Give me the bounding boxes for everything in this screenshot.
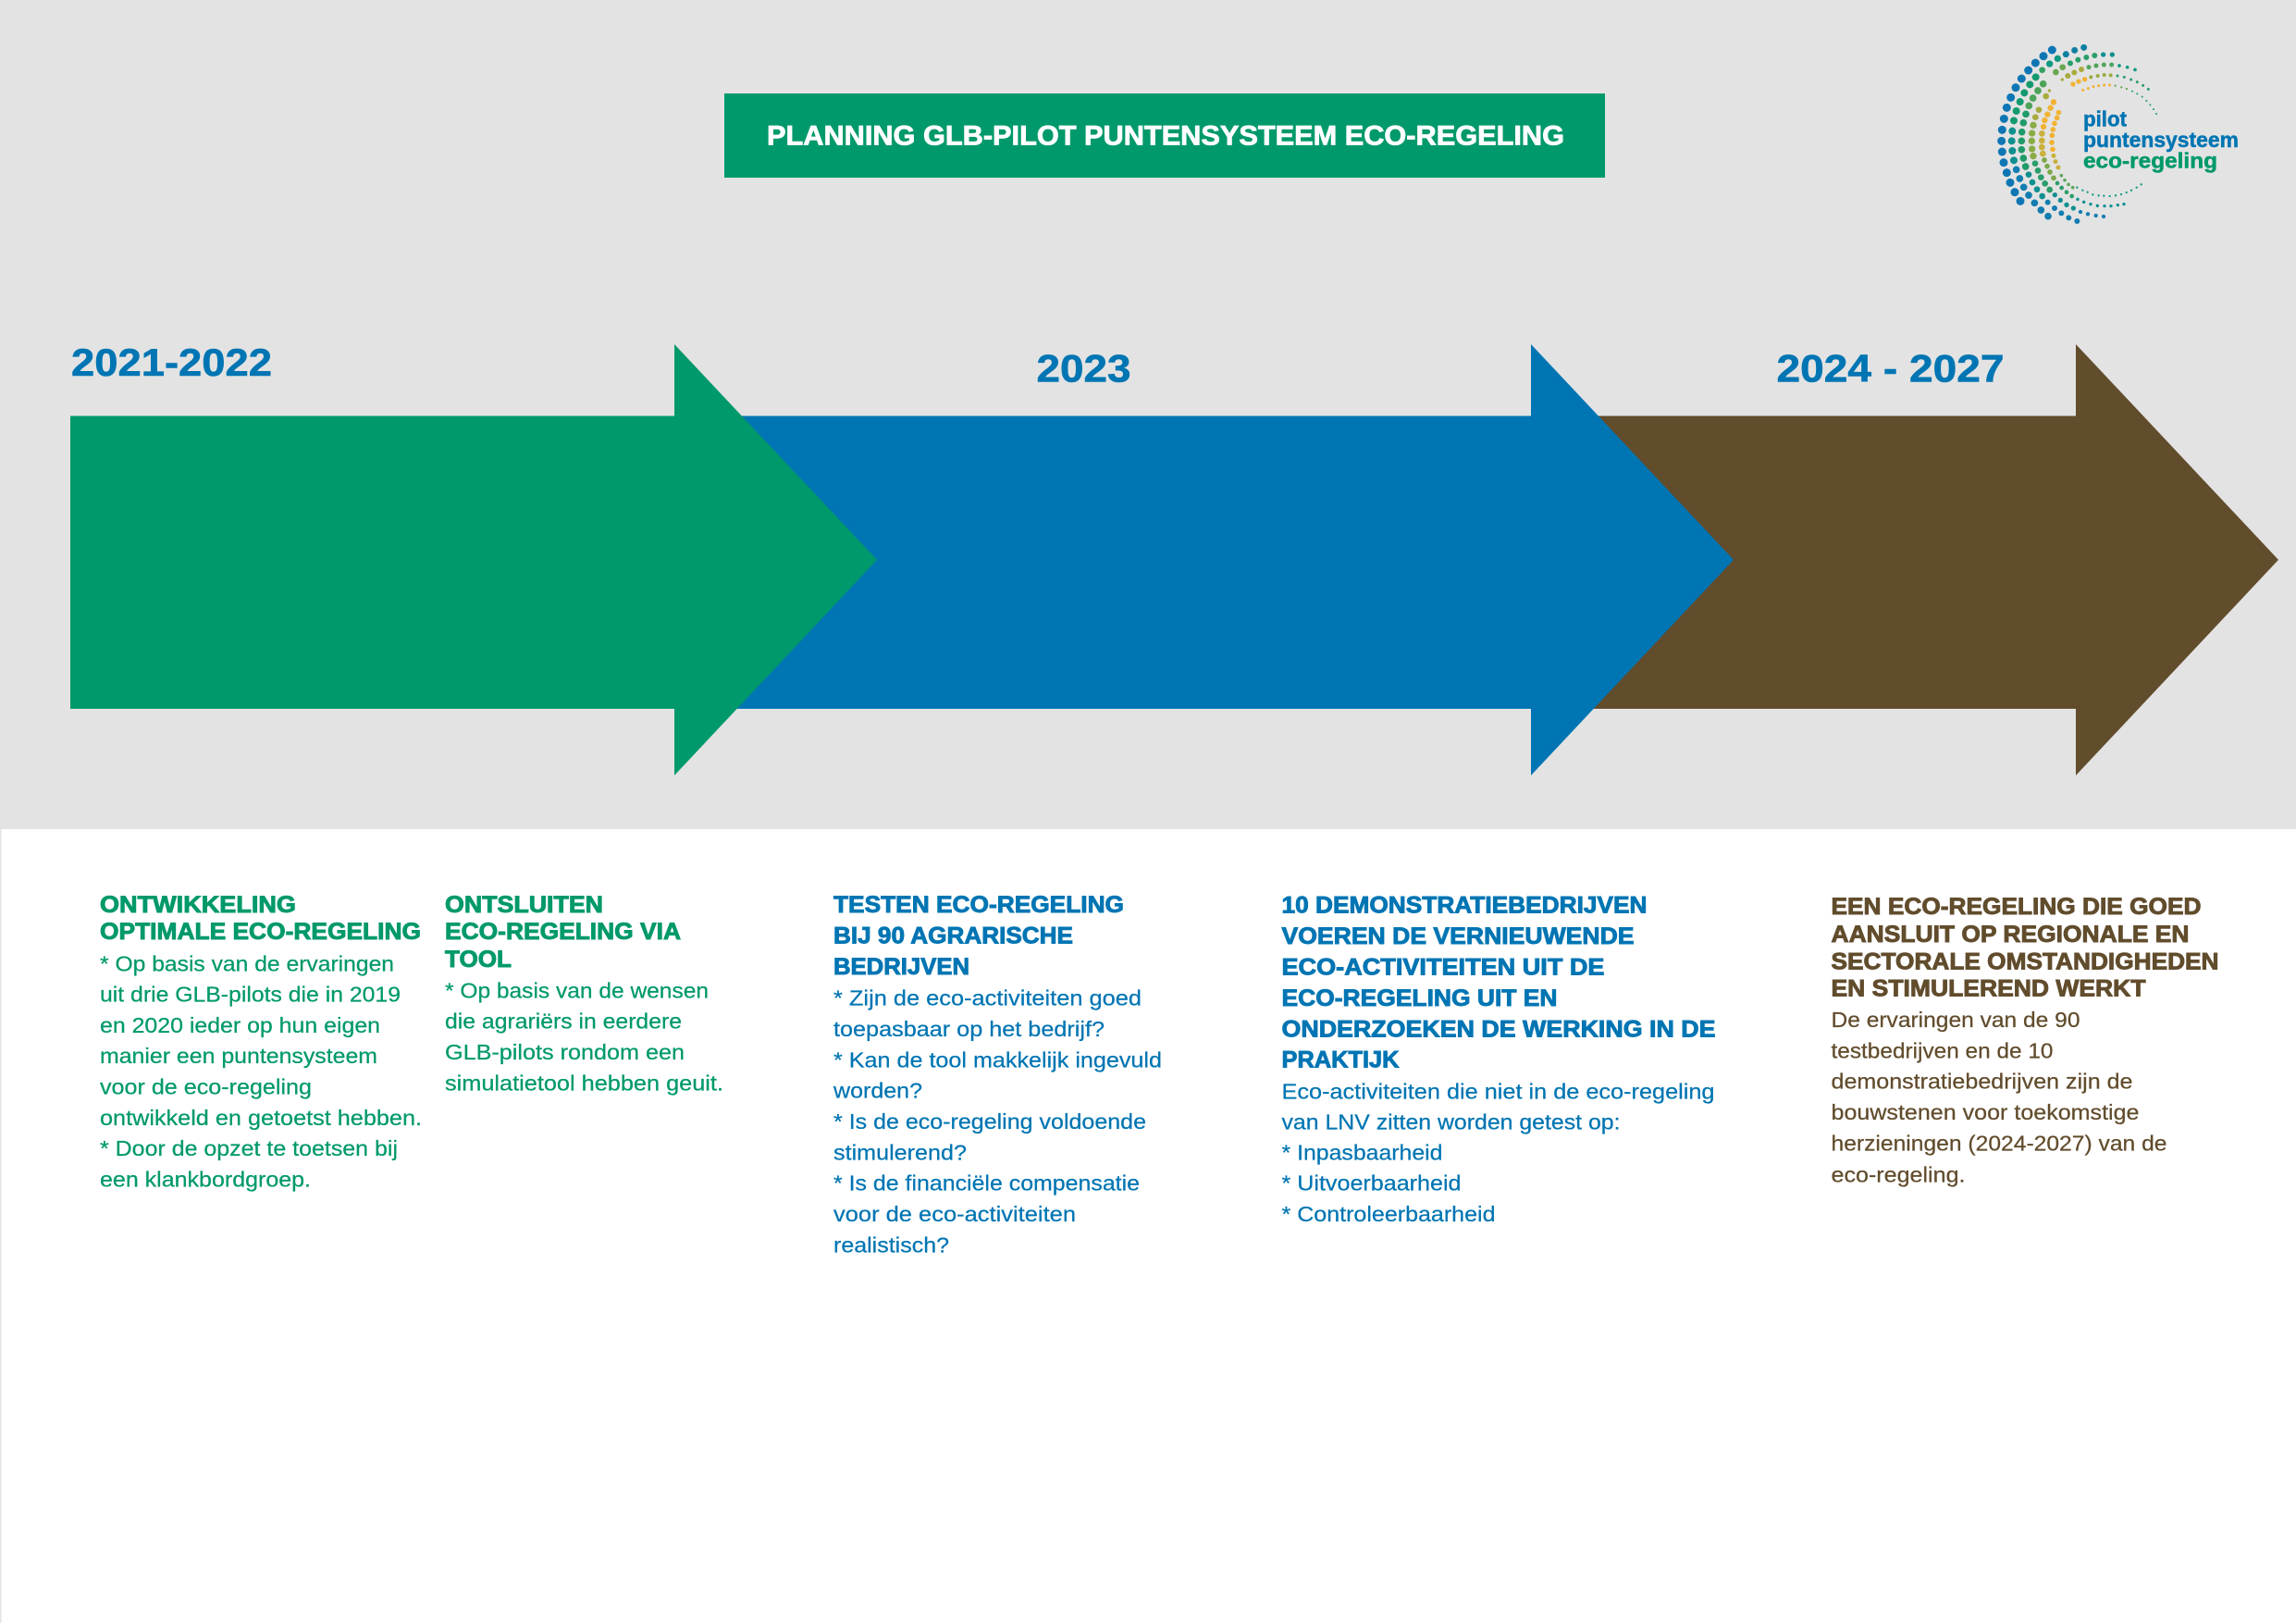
body: * Door de opzet te toetsen bij	[100, 1136, 398, 1160]
body: * Uitvoerbaarheid	[1282, 1171, 1462, 1196]
heading	[1832, 894, 2218, 1002]
body: bouwstenen voor toekomstige	[1832, 1100, 2139, 1124]
body: * Inpasbaarheid	[1282, 1140, 1443, 1164]
body	[1832, 1008, 2166, 1186]
heading: BEDRIJVEN	[833, 954, 969, 980]
arrow: green 2021-2022	[70, 344, 877, 775]
body: * Controleerbaarheid	[1282, 1202, 1495, 1226]
text block: ontwikkeling optimale eco-regeling	[100, 892, 422, 1192]
logo wordmark	[2083, 107, 2239, 173]
year label 2024-2027: 2024 - 2027	[1776, 347, 2004, 390]
heading: EN STIMULEREND WERKT	[1832, 976, 2146, 1002]
heading: ECO-ACTIVITEITEN UIT DE	[1282, 954, 1604, 980]
body: uit drie GLB-pilots die in 2019	[100, 983, 401, 1007]
arrow: brown 2024-2027	[1536, 344, 2278, 775]
heading: SECTORALE OMSTANDIGHEDEN	[1832, 949, 2218, 975]
year label 2023: 2023	[1036, 347, 1130, 390]
logo wordmark: eco-regeling	[2083, 149, 2217, 173]
heading: ONDERZOEKEN DE WERKING IN DE	[1282, 1016, 1715, 1042]
title banner: PLANNING GLB-PILOT PUNTENSYSTEEM ECO-REGELING	[767, 121, 1564, 152]
heading: PRAKTIJK	[1282, 1047, 1399, 1073]
body: toepasbaar op het bedrijf?	[833, 1017, 1105, 1041]
arrow: blue 2023	[685, 344, 1734, 775]
body: ontwikkeld en getoetst hebben.	[100, 1106, 422, 1130]
body: Eco-activiteiten die niet in de eco-regeling	[1282, 1079, 1715, 1103]
body: realistisch?	[833, 1233, 949, 1257]
body: herzieningen (2024-2027) van de	[1832, 1131, 2166, 1155]
body: voor de eco-activiteiten	[833, 1202, 1076, 1226]
logo wordmark: puntensysteem	[2083, 128, 2239, 152]
text block: 10 demonstratiebedrijven	[1282, 893, 1715, 1226]
body	[833, 986, 1162, 1257]
heading: ECO-REGELING VIA	[445, 919, 681, 945]
body: van LNV zitten worden getest op:	[1282, 1110, 1621, 1134]
body: * Kan de tool makkelijk ingevuld	[833, 1047, 1162, 1072]
heading: ONTSLUITEN	[445, 892, 603, 918]
body: een klankbordgroep.	[100, 1168, 311, 1192]
heading	[100, 892, 421, 945]
heading: TESTEN ECO-REGELING	[833, 892, 1124, 918]
year label 2021-2022: 2021-2022	[71, 341, 272, 384]
body: * Is de eco-regeling voldoende	[833, 1109, 1146, 1134]
logo wordmark: pilot	[2083, 107, 2127, 131]
heading	[833, 892, 1124, 980]
heading: ONTWIKKELING	[100, 892, 296, 918]
heading: ECO-REGELING UIT EN	[1282, 985, 1558, 1011]
body: * Zijn de eco-activiteiten goed	[833, 986, 1142, 1010]
body	[1282, 1079, 1715, 1226]
body: stimulerend?	[833, 1140, 967, 1164]
body: testbedrijven en de 10	[1832, 1038, 2054, 1062]
body: * Op basis van de wensen	[445, 978, 709, 1002]
heading: TOOL	[445, 947, 512, 973]
logo: pilot puntensysteem eco-regeling	[2002, 47, 2239, 221]
body: die agrariërs in eerdere	[445, 1010, 682, 1034]
text block: ontsluiten eco-regeling via tool	[445, 892, 723, 1095]
title banner	[724, 93, 1605, 178]
body: en 2020 ieder op hun eigen	[100, 1013, 380, 1037]
heading: VOEREN DE VERNIEUWENDE	[1282, 923, 1634, 949]
heading: 10 DEMONSTRATIEBEDRIJVEN	[1282, 893, 1647, 919]
body: GLB-pilots rondom een	[445, 1040, 685, 1064]
body: manier een puntensysteem	[100, 1044, 377, 1068]
heading: BIJ 90 AGRARISCHE	[833, 923, 1073, 948]
body: De ervaringen van de 90	[1832, 1008, 2080, 1032]
body: eco-regeling.	[1832, 1162, 1965, 1186]
text block: testen eco-regeling	[833, 892, 1162, 1257]
body: simulatietool hebben geuit.	[445, 1071, 723, 1095]
icon: dotted spiral	[2002, 47, 2156, 221]
heading	[445, 892, 681, 973]
panel: grey header band	[0, 0, 2296, 829]
body: worden?	[833, 1079, 922, 1103]
text block: een eco-regeling die goed aansluit	[1832, 894, 2218, 1186]
body: * Op basis van de ervaringen	[100, 951, 394, 975]
heading	[1282, 893, 1715, 1073]
heading: AANSLUIT OP REGIONALE EN	[1832, 922, 2189, 948]
body	[100, 951, 422, 1192]
body: voor de eco-regeling	[100, 1075, 312, 1099]
heading: OPTIMALE ECO-REGELING	[100, 919, 421, 945]
body: * Is de financiële compensatie	[833, 1171, 1140, 1196]
body: demonstratiebedrijven zijn de	[1832, 1070, 2133, 1094]
body	[445, 978, 723, 1095]
heading: EEN ECO-REGELING DIE GOED	[1832, 894, 2202, 920]
